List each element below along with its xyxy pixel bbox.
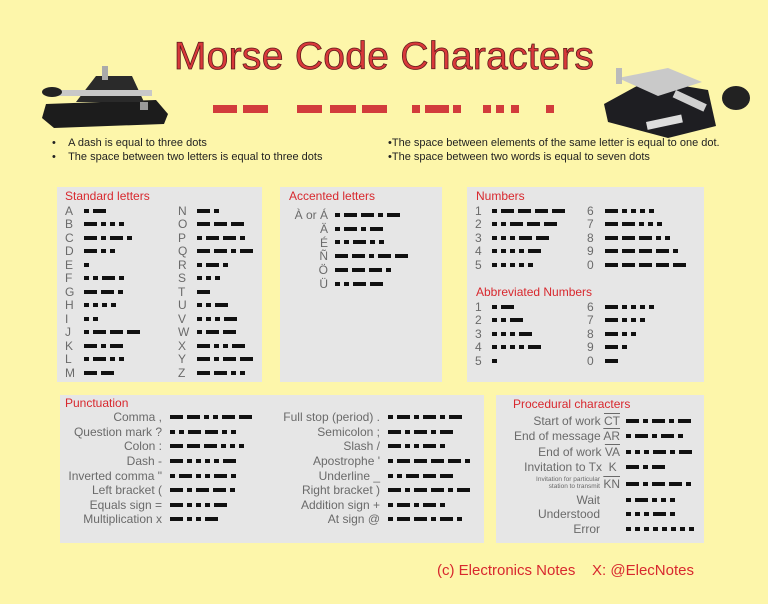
column A-M: B <box>65 217 73 231</box>
numbers 1-5: 5 <box>475 258 482 272</box>
notes left: • The space between two letters is equal to three dots <box>52 150 322 162</box>
notes right: •The space between two words is equal to seven dots <box>388 150 650 162</box>
punctuation right column: Apostrophe ' <box>313 454 380 468</box>
title: Morse Code Characters <box>174 35 594 78</box>
column A-M: I <box>65 312 68 326</box>
icon: right morse key <box>604 68 750 138</box>
column A-M <box>65 204 140 380</box>
procedural rows: station to transmit <box>549 482 600 490</box>
punctuation right column: Right bracket ) <box>302 483 380 497</box>
footer credit: (c) Electronics Notes X: @ElecNotes <box>437 562 694 579</box>
column N-Z: V <box>178 312 186 326</box>
accented rows: É <box>320 236 328 250</box>
procedural rows: KN <box>603 476 620 490</box>
punctuation left column: Multiplication x <box>83 512 162 526</box>
abbreviated 6-0: 8 <box>587 327 594 341</box>
procedural rows <box>514 413 694 536</box>
abbreviated 6-0: 6 <box>587 300 594 314</box>
column A-M: D <box>65 244 74 258</box>
panel: numbers <box>467 187 704 382</box>
accented rows <box>294 208 408 291</box>
numbers 6-0: 6 <box>587 204 594 218</box>
column N-Z: O <box>178 217 187 231</box>
column N-Z: Q <box>178 244 187 258</box>
column N-Z: P <box>178 231 186 245</box>
column N-Z <box>178 204 253 380</box>
punctuation left column: Dash - <box>127 454 162 468</box>
numbers 6-0 <box>587 204 686 272</box>
punctuation right column: Slash / <box>343 439 380 453</box>
numbers 6-0: 0 <box>587 258 594 272</box>
abbreviated 1-5: 2 <box>475 313 482 327</box>
abbreviated 1-5: 3 <box>475 327 482 341</box>
numbers 1-5: 3 <box>475 231 482 245</box>
column A-M: G <box>65 285 74 299</box>
heading: standard letters: Standard letters <box>65 189 150 203</box>
punctuation right column: Underline _ <box>319 469 380 483</box>
heading: numbers: Numbers <box>476 189 525 203</box>
title morse bars <box>213 105 554 113</box>
punctuation right column: Semicolon ; <box>317 425 380 439</box>
punctuation right column: At sign @ <box>328 512 380 526</box>
numbers 6-0: 8 <box>587 231 594 245</box>
column A-M: J <box>65 325 71 339</box>
panel: punctuation <box>60 395 484 543</box>
punctuation left column: Question mark ? <box>74 425 162 439</box>
punctuation left column: Left bracket ( <box>92 483 162 497</box>
punctuation right column <box>283 410 470 526</box>
column A-M: A <box>65 204 73 218</box>
punctuation left column <box>68 410 252 526</box>
procedural rows: Start of work CT <box>533 414 620 428</box>
procedural rows: Wait <box>576 492 600 506</box>
notes right <box>388 137 720 162</box>
notes left <box>52 137 322 162</box>
abbreviated 1-5: 5 <box>475 354 482 368</box>
abbreviated 6-0: 0 <box>587 354 594 368</box>
punctuation left column: Comma , <box>113 410 162 424</box>
column N-Z: W <box>178 325 189 339</box>
column A-M: H <box>65 298 74 312</box>
heading: accented letters: Accented letters <box>289 189 375 203</box>
numbers 6-0: 7 <box>587 217 594 231</box>
column N-Z: S <box>178 271 186 285</box>
punctuation left column: Colon : <box>124 439 162 453</box>
heading: procedural characters: Procedural characters <box>513 397 630 411</box>
column A-M: C <box>65 231 74 245</box>
procedural rows: End of message AR <box>514 429 620 443</box>
column N-Z: T <box>178 285 185 299</box>
procedural rows: Invitation for particular <box>536 476 600 483</box>
column N-Z: U <box>178 298 187 312</box>
column A-M: F <box>65 271 72 285</box>
panel: procedural characters <box>496 395 704 543</box>
abbreviated 1-5: 1 <box>475 300 482 314</box>
icon: left morse key <box>42 66 168 128</box>
panel: standard letters <box>57 187 262 382</box>
abbreviated 6-0: 7 <box>587 313 594 327</box>
numbers 1-5 <box>475 204 565 272</box>
accented rows: Ä <box>320 222 328 236</box>
accented rows: Ñ <box>319 249 328 263</box>
column A-M: M <box>65 366 75 380</box>
column N-Z: N <box>178 204 187 218</box>
numbers 1-5: 2 <box>475 217 482 231</box>
abbreviated 6-0 <box>587 300 654 368</box>
procedural rows: End of work VA <box>538 445 620 459</box>
heading: abbreviated numbers: Abbreviated Numbers <box>476 285 592 299</box>
accented rows: Ö <box>319 263 328 277</box>
column A-M: K <box>65 339 73 353</box>
column A-M: E <box>65 258 73 272</box>
notes right: •The space between elements of the same letter is equal to one dot. <box>388 137 720 149</box>
numbers 1-5: 4 <box>475 244 482 258</box>
column N-Z: R <box>178 258 187 272</box>
notes left: • A dash is equal to three dots <box>52 137 207 149</box>
procedural rows: Understood <box>538 507 600 521</box>
punctuation right column: Full stop (period) . <box>283 410 380 424</box>
accented rows: À or Á <box>295 208 328 222</box>
abbreviated 6-0: 9 <box>587 340 594 354</box>
abbreviated 1-5: 4 <box>475 340 482 354</box>
heading: punctuation: Punctuation <box>65 396 128 410</box>
panel: accented letters <box>280 187 442 382</box>
punctuation right column: Addition sign + <box>301 498 380 512</box>
column N-Z: Y <box>178 352 186 366</box>
column N-Z: Z <box>178 366 185 380</box>
punctuation left column: Inverted comma " <box>68 469 162 483</box>
numbers 1-5: 1 <box>475 204 482 218</box>
procedural rows: Invitation to Tx K <box>524 460 617 474</box>
procedural rows: Error <box>573 522 600 536</box>
column N-Z: X <box>178 339 186 353</box>
accented rows: Ü <box>319 277 328 291</box>
abbreviated 1-5 <box>475 300 541 368</box>
numbers 6-0: 9 <box>587 244 594 258</box>
column A-M: L <box>65 352 72 366</box>
punctuation left column: Equals sign = <box>90 498 162 512</box>
